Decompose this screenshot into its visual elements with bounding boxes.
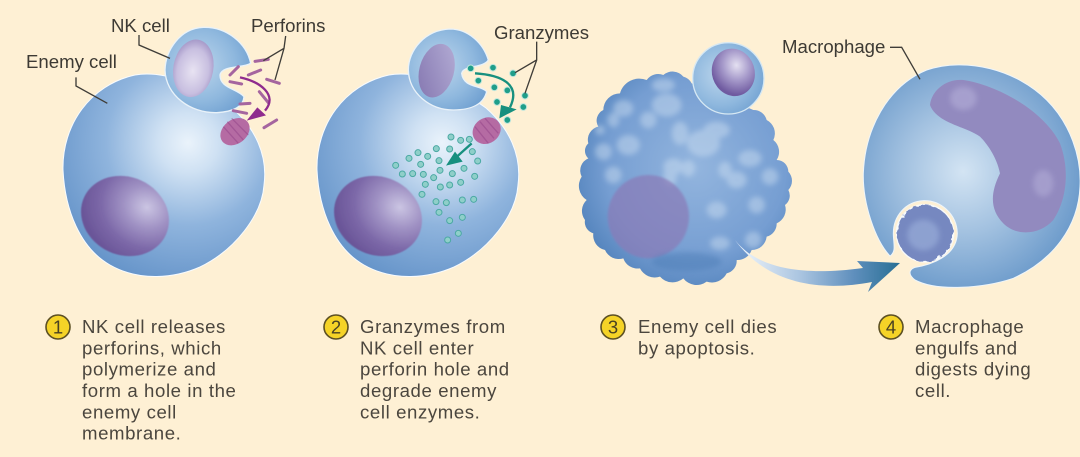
membrane blebs	[595, 78, 778, 250]
NK cell 2 with granzymes	[393, 29, 537, 243]
teal arrow into cell	[446, 143, 472, 166]
text 4: Macrophage	[915, 316, 1024, 337]
leader line	[890, 47, 920, 79]
leader lines	[515, 42, 537, 93]
perforin pore	[215, 112, 255, 151]
text 2: cell enzymes.	[360, 401, 480, 422]
step 2 caption	[324, 315, 510, 422]
panel: step 2 granzymes enter	[317, 29, 537, 277]
number badge 2	[324, 315, 348, 339]
step 3 caption	[601, 315, 777, 358]
text 3: Enemy cell dies	[638, 316, 777, 337]
dying cell body	[579, 72, 792, 285]
text 2: Granzymes from	[360, 316, 506, 337]
label: Macrophage: Macrophage	[782, 36, 885, 57]
panel: step 3 apoptotic cell	[579, 43, 792, 285]
number badge 4	[879, 315, 903, 339]
number badge 3: 3	[608, 316, 618, 338]
label: Enemy cell: Enemy cell	[26, 51, 117, 72]
text 2: degrade enemy	[360, 380, 497, 401]
text 4: engulfs and	[915, 337, 1018, 358]
text 2: perforin hole and	[360, 359, 510, 380]
panel: step 1 NK cell releases perforins	[63, 27, 286, 277]
label: NK cell: NK cell	[111, 15, 170, 36]
NK cell 1 with perforins	[76, 27, 286, 151]
teal arrow into pore	[475, 73, 517, 118]
text 1: perforins, which	[82, 337, 222, 358]
enemy cell 2 nucleus	[321, 162, 435, 270]
granzymes outside	[467, 64, 528, 123]
text 4: digests dying	[915, 359, 1031, 380]
enemy cell 1	[63, 74, 265, 277]
text 1: enemy cell	[82, 401, 177, 422]
perforin molecules	[230, 59, 279, 128]
purple arrow	[240, 77, 270, 121]
NK cell body 2	[408, 29, 488, 110]
number badge 1	[46, 315, 70, 339]
NK cell nucleus 1	[169, 36, 218, 100]
text 3: by apoptosis.	[638, 337, 755, 358]
NK cell body 1	[165, 27, 251, 113]
number badge 3	[601, 315, 625, 339]
NK cell nucleus 2	[413, 40, 460, 102]
text 1: membrane.	[82, 423, 181, 444]
macrophage nucleus	[930, 80, 1066, 232]
text 4: cell.	[915, 380, 951, 401]
perforin pore 2	[467, 112, 506, 149]
panel: step 4 macrophage	[863, 47, 1080, 287]
step 1 caption	[46, 315, 236, 444]
text 1: polymerize and	[82, 359, 216, 380]
label: Perforins: Perforins	[251, 15, 325, 36]
number badge 4: 4	[886, 316, 896, 338]
number badge 2: 2	[331, 316, 341, 338]
enemy cell 2	[317, 74, 519, 277]
leader lines	[76, 35, 286, 103]
text 2: NK cell enter	[360, 337, 474, 358]
enemy cell 1 nucleus	[68, 162, 182, 270]
number badge 1: 1	[53, 316, 63, 338]
NK cell nucleus 3	[706, 43, 761, 102]
text 1: form a hole in the	[82, 380, 236, 401]
text 1: NK cell releases	[82, 316, 226, 337]
engulfed cell vesicle	[896, 204, 954, 263]
step 4 caption	[879, 315, 1031, 401]
macrophage body	[863, 65, 1080, 287]
arrow: dying cell to macrophage	[735, 240, 900, 292]
lower shadow	[652, 252, 722, 271]
label: Granzymes: Granzymes	[494, 22, 589, 43]
dying cell nucleus	[608, 175, 689, 258]
granzymes inside enemy cell	[393, 134, 481, 243]
NK cell 3	[693, 43, 764, 114]
